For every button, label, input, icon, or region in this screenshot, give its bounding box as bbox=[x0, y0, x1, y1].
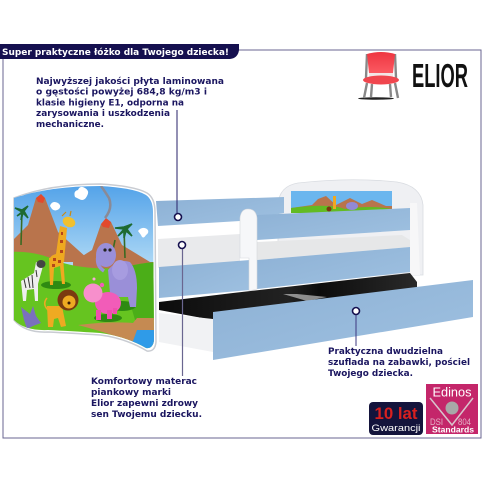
text: board description: o gęstości powyżej 684,8 kg/m3 i bbox=[36, 87, 207, 98]
logo: Elior bbox=[358, 52, 468, 100]
front rail bbox=[257, 208, 410, 240]
badge: 10 years warranty bbox=[369, 402, 423, 435]
lower frame bbox=[159, 313, 213, 352]
text: mattress description: sen Twojemu dziecku. bbox=[91, 410, 202, 420]
volcanoes bbox=[10, 198, 87, 262]
text: mattress description: Komfortowy materac bbox=[91, 377, 197, 387]
callout: drawer marker bbox=[352, 308, 360, 346]
frame outline bbox=[3, 50, 481, 438]
hippo bbox=[84, 278, 122, 322]
headboard picture bbox=[291, 191, 392, 213]
text: mattress description bbox=[91, 377, 202, 420]
text: drawer description: Twojego dziecka. bbox=[328, 369, 413, 379]
dark drawer interior bbox=[159, 273, 417, 320]
text: board description: mechaniczne. bbox=[36, 120, 104, 130]
ground bbox=[14, 252, 154, 348]
callout: board marker bbox=[174, 110, 182, 220]
clouds bbox=[19, 187, 148, 238]
back rail bbox=[156, 197, 284, 226]
badge: 10 years warranty: Gwarancji bbox=[372, 423, 420, 434]
side panel with safari picture bbox=[10, 180, 160, 355]
text: drawer description: Praktyczna dwudzielna bbox=[328, 347, 443, 357]
text: board description: zarysowania i uszkodzenia bbox=[36, 109, 170, 119]
icon: red chair bbox=[358, 52, 399, 100]
side panel bbox=[159, 260, 250, 298]
bed illustration bbox=[156, 180, 473, 360]
badge: Edinos standards: Standards bbox=[432, 424, 474, 434]
badge: 10 years warranty: 10 lat bbox=[374, 404, 418, 423]
badge: Edinos standards: Edinos bbox=[432, 384, 472, 400]
text: drawer description bbox=[328, 347, 470, 379]
mattress bbox=[158, 234, 240, 268]
badge: Edinos standards: 804 bbox=[458, 417, 471, 428]
palm trees bbox=[20, 216, 126, 258]
light gap in drawer bbox=[283, 294, 327, 301]
callout: mattress marker bbox=[178, 242, 186, 376]
text: board description: klasie higieny E1, odporna na bbox=[36, 98, 184, 108]
sand and water bbox=[78, 318, 154, 344]
right post bbox=[410, 203, 420, 275]
text: mattress description: piankowy marki bbox=[91, 388, 171, 398]
elephant bbox=[96, 243, 137, 311]
badge: Edinos standards bbox=[426, 384, 478, 434]
text: board description bbox=[36, 76, 224, 130]
header banner bbox=[0, 44, 239, 59]
zebra bbox=[21, 260, 46, 301]
purple plant bbox=[21, 306, 41, 329]
header title: Super praktyczne łóżko dla Twojego dziecka! bbox=[2, 47, 229, 58]
text: board description: Najwyższej jakości płyta laminowana bbox=[36, 76, 224, 87]
lion bbox=[45, 290, 78, 327]
drawer front bbox=[213, 280, 473, 360]
headboard bbox=[278, 180, 423, 275]
rail post bbox=[240, 209, 257, 291]
text: drawer description: szuflada na zabawki, pościel bbox=[328, 357, 470, 368]
badge: Edinos standards: DSI bbox=[430, 417, 443, 428]
text: mattress description: Elior zapewni zdrowy bbox=[91, 399, 198, 409]
giraffe bbox=[41, 211, 77, 289]
